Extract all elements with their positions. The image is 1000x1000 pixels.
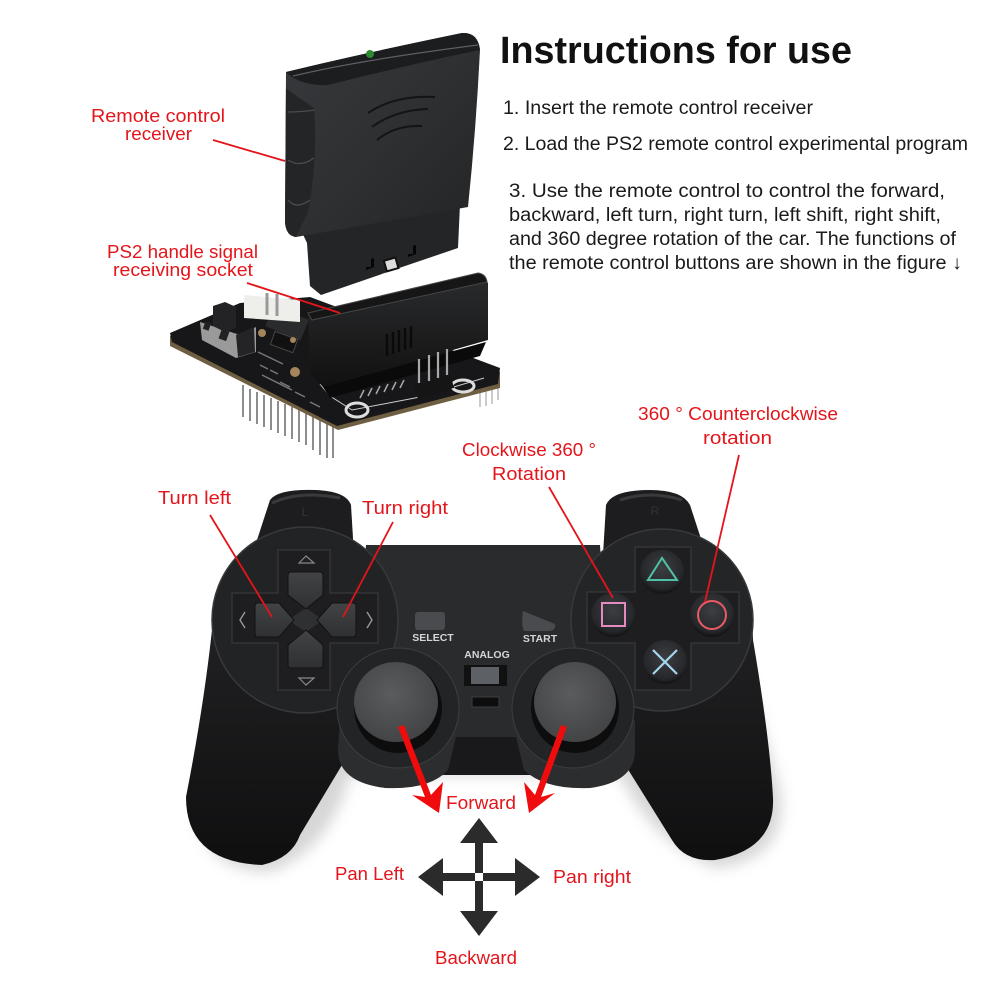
analog button: ANALOG: [464, 649, 510, 661]
shoulder buttons: [257, 490, 703, 555]
label: PS2 handle signal receiving socket: [107, 241, 340, 313]
grips and body: [186, 610, 773, 865]
remote control receiver: [285, 33, 480, 295]
instruction step 2: 2. Load the PS2 remote control experimental program: [503, 134, 968, 155]
label: turn left: [158, 487, 272, 617]
arrow: right stick red: [524, 725, 567, 813]
label: 360 counterclockwise rotation: [638, 403, 838, 602]
analog button: [464, 649, 510, 707]
label: remote control receiver: receiver: [125, 123, 192, 144]
soft shadow: [199, 650, 781, 872]
select button: [412, 612, 454, 644]
label: PS2 handle signal receiving socket: PS2 handle signal: [107, 241, 258, 262]
left analog stick: [337, 648, 460, 788]
label: remote control receiver: Remote control: [91, 105, 225, 126]
label: pan left: Pan Left: [335, 863, 404, 884]
label: clockwise 360 rotation: [462, 439, 613, 598]
instruction step 3: and 360 degree rotation of the car. The functions of: [509, 229, 957, 250]
square button: [591, 593, 635, 637]
label: turn right: [343, 497, 448, 617]
instruction step 3: backward, left turn, right turn, left shift, right shift,: [509, 205, 941, 226]
instruction step 3: the remote control buttons are shown in the figure ↓: [509, 253, 962, 274]
label: turn left: Turn left: [158, 487, 231, 508]
action button recess: [587, 547, 739, 690]
right button disc: [571, 529, 753, 711]
label: backward: Backward: [435, 947, 517, 968]
triangle button: [640, 550, 684, 594]
circle button: [690, 593, 734, 637]
cross button: [643, 640, 687, 684]
label: 360 counterclockwise rotation: 360 ° Counterclockwise: [638, 403, 838, 424]
shoulder buttons: R: [651, 504, 660, 518]
circuit board: [170, 293, 500, 458]
title: Instructions for use: [500, 30, 852, 72]
instruction step 3: 3. Use the remote control to control the forward,: [509, 181, 945, 202]
product photo: receiver and board: [170, 33, 500, 458]
label: pan right: Pan right: [553, 866, 631, 887]
arrow: left stick red: [398, 725, 443, 813]
label: remote control receiver: [91, 105, 285, 161]
label: turn right: Turn right: [362, 497, 448, 518]
shoulder buttons: L: [302, 505, 309, 519]
instruction step 1: 1. Insert the remote control receiver: [503, 98, 814, 119]
left D-pad disc: [212, 527, 398, 713]
start button: START: [523, 633, 558, 645]
icon: four-way direction arrows: [418, 818, 540, 936]
label: clockwise 360 rotation: Rotation: [492, 463, 566, 484]
start button: [522, 611, 558, 645]
label: PS2 handle signal receiving socket: receiving socket: [113, 259, 253, 280]
select button: SELECT: [412, 632, 454, 644]
D-pad: [232, 550, 378, 690]
center plate: [352, 545, 612, 737]
PS2 signal receiving socket: [308, 273, 488, 400]
label: 360 counterclockwise rotation: rotation: [703, 427, 772, 448]
instruction step 3: [509, 181, 962, 274]
label: clockwise 360 rotation: Clockwise 360 °: [462, 439, 596, 460]
right analog stick: [512, 648, 635, 788]
gamepad: [186, 490, 781, 872]
label: forward: Forward: [446, 792, 516, 813]
